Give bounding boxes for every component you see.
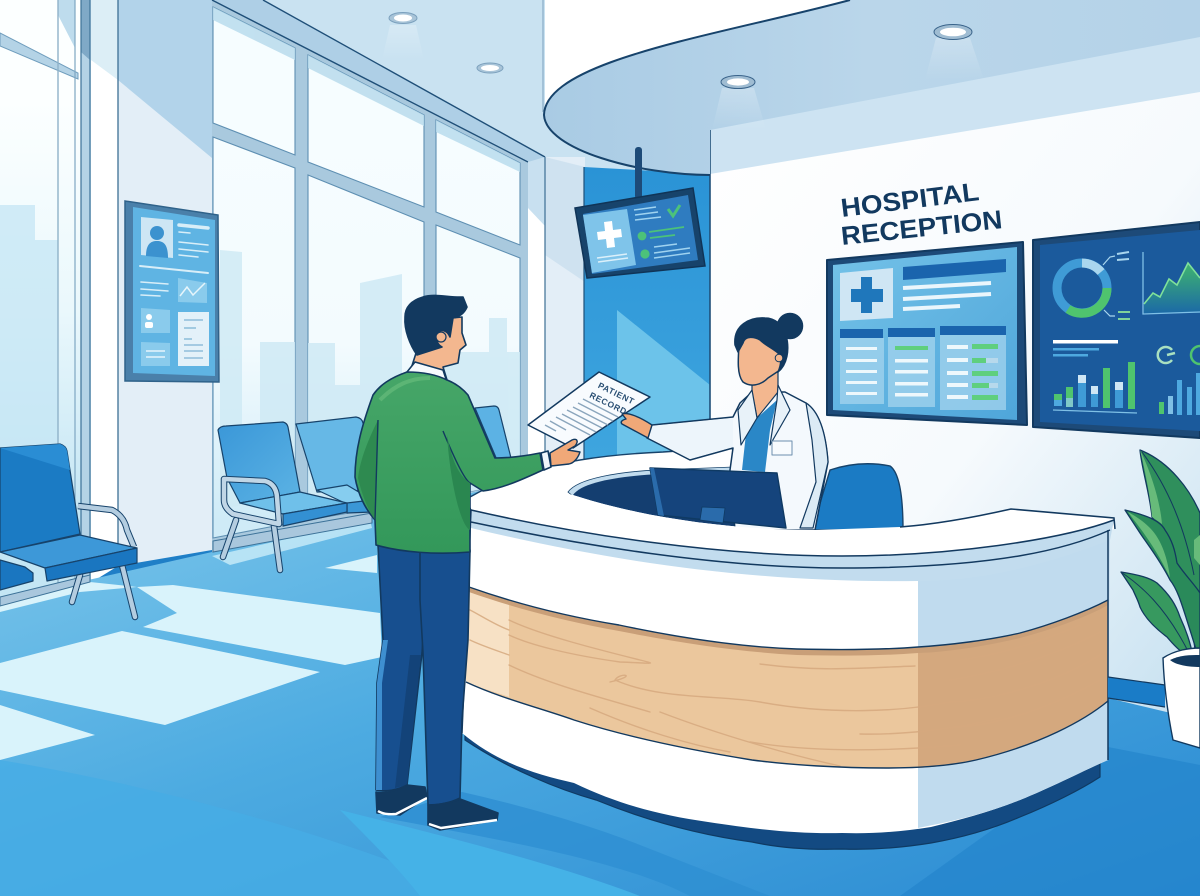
receptionist (647, 314, 828, 530)
chair 3 back (475, 406, 511, 460)
cuff (541, 451, 551, 470)
soffit lights (712, 88, 766, 130)
chair 2 (296, 417, 378, 513)
left trouser leg (376, 545, 430, 791)
reception wall (710, 90, 1200, 720)
counter band (471, 510, 1114, 581)
floor light patches (0, 520, 382, 760)
wood grain (470, 610, 1100, 766)
main window wall (212, 0, 545, 560)
patient hand (550, 439, 580, 466)
left column with baseboard (92, 0, 212, 586)
curved soffit (543, 0, 1200, 175)
right wall section (528, 37, 1200, 720)
left shoe (376, 785, 427, 815)
blue accent wall (584, 167, 710, 470)
ceiling lights left (382, 12, 503, 73)
chair 1 legs (223, 520, 280, 570)
scrub top (742, 397, 777, 472)
cross tile (840, 268, 893, 321)
hair (405, 295, 467, 355)
counter well (568, 466, 815, 530)
neck and face (410, 317, 466, 380)
baseboard and plant (1108, 450, 1200, 748)
collar (738, 385, 790, 445)
plant pot (1163, 648, 1200, 748)
window sill rail (0, 513, 372, 606)
face (738, 330, 785, 385)
hands (550, 414, 652, 466)
plant leaves (1121, 450, 1200, 662)
hair (735, 318, 788, 372)
right trouser leg (420, 550, 470, 805)
desk white front (462, 510, 1110, 833)
light floor swoosh (340, 810, 640, 896)
chair 1 arm (224, 479, 279, 524)
man (355, 295, 551, 830)
desk outlines (462, 509, 1115, 760)
gauges (1158, 346, 1200, 364)
collar (407, 362, 447, 382)
reception desk (462, 509, 1115, 849)
chair 1 (218, 422, 347, 570)
desk base (465, 725, 1100, 849)
receptionist chair (812, 464, 903, 530)
analytics dashboard (1033, 222, 1200, 438)
table columns (840, 326, 1006, 410)
donut chart (1057, 252, 1130, 319)
hanging TV screen (575, 147, 705, 278)
wall poster (125, 201, 219, 382)
sweater (355, 372, 543, 553)
badge (772, 441, 792, 455)
floor (0, 480, 1200, 896)
rear chairs (218, 406, 511, 570)
reception counter top back (469, 448, 800, 530)
neck (752, 372, 778, 418)
wood band (466, 587, 1108, 768)
lab coat (647, 392, 828, 530)
shaded right side (918, 530, 1110, 828)
patient record document: PATIENT (596, 380, 636, 406)
right shoe (428, 799, 498, 830)
right bars (1159, 373, 1200, 415)
receptionist hand (621, 414, 652, 438)
shoe shadow band (380, 792, 770, 896)
desk computer monitor (650, 468, 786, 528)
front left chair (0, 444, 137, 617)
window panes (213, 7, 520, 538)
left window (0, 0, 118, 610)
patient record document: RECORD (588, 390, 629, 417)
heading: RECEPTION (839, 204, 1004, 251)
bar chart (1053, 362, 1137, 413)
information display (827, 242, 1027, 425)
heading: HOSPITAL (839, 176, 981, 223)
heading (839, 176, 1004, 251)
patient record document (528, 372, 650, 448)
glass top tint bands (213, 7, 520, 172)
counter top front (471, 492, 1115, 557)
city silhouettes (220, 250, 520, 518)
area chart (1143, 252, 1200, 314)
